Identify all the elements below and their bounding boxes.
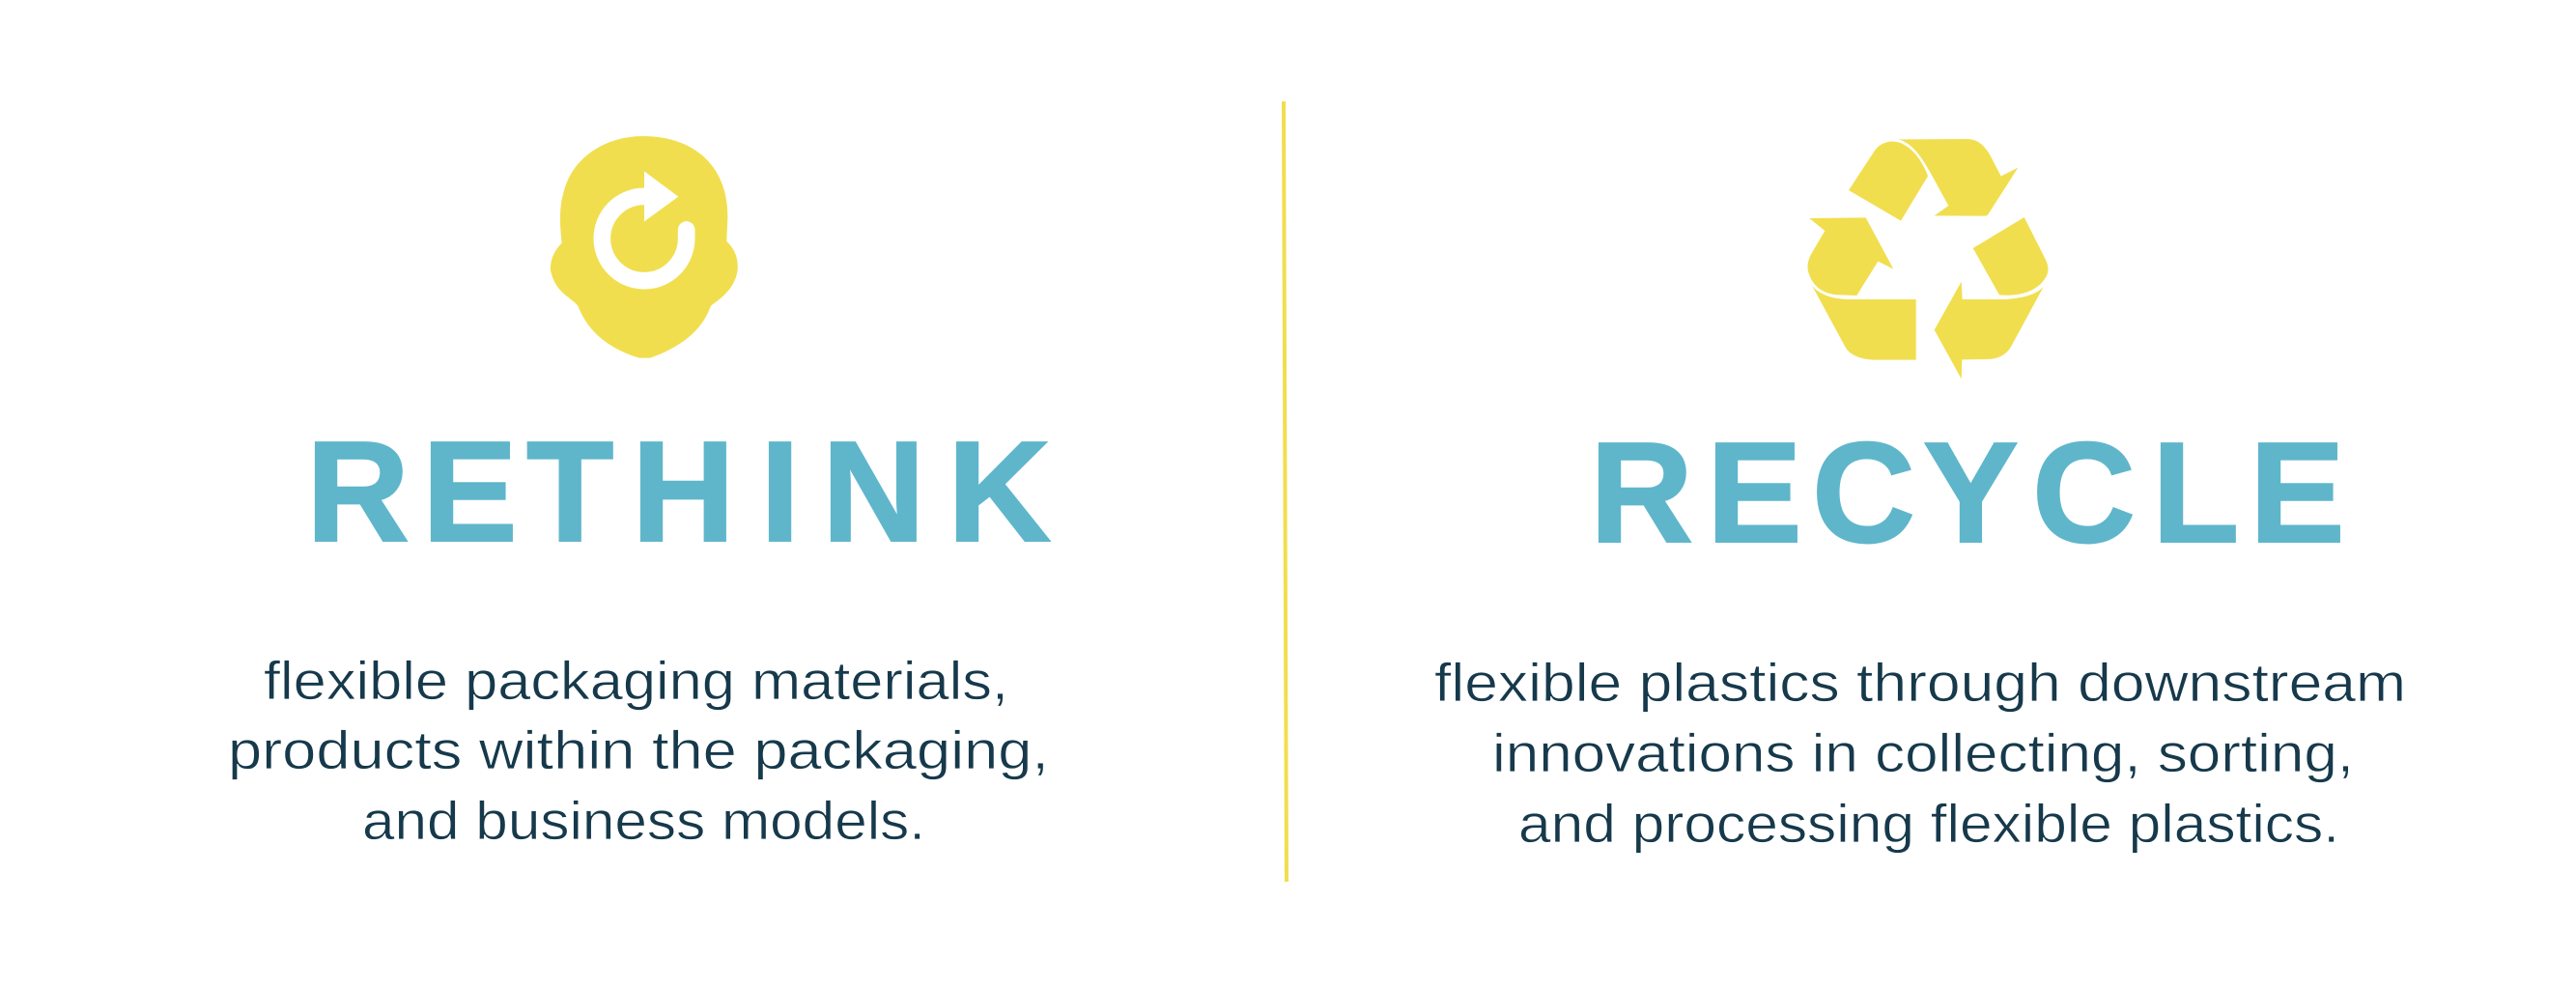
- text: recycle description: and processing flexible plastics.: [1518, 793, 2339, 854]
- text: rethink description: [228, 650, 1049, 851]
- heading: RECYCLE: RECYCLE: [1590, 413, 2345, 573]
- text: rethink description: flexible packaging materials,: [264, 650, 1008, 711]
- text: rethink description: products within the packaging,: [228, 719, 1049, 780]
- heading: RETHINK: RETHINK: [306, 412, 1051, 572]
- text: rethink description: and business models.: [362, 790, 925, 851]
- divider line: [1284, 101, 1287, 882]
- text: recycle description: [1434, 652, 2406, 854]
- text: recycle description: innovations in collecting, sorting,: [1492, 722, 2354, 783]
- text: recycle description: flexible plastics through downstream: [1434, 652, 2406, 713]
- icon: recycle symbol: [1808, 139, 2048, 379]
- icon: head with rethink arrow: [551, 136, 738, 358]
